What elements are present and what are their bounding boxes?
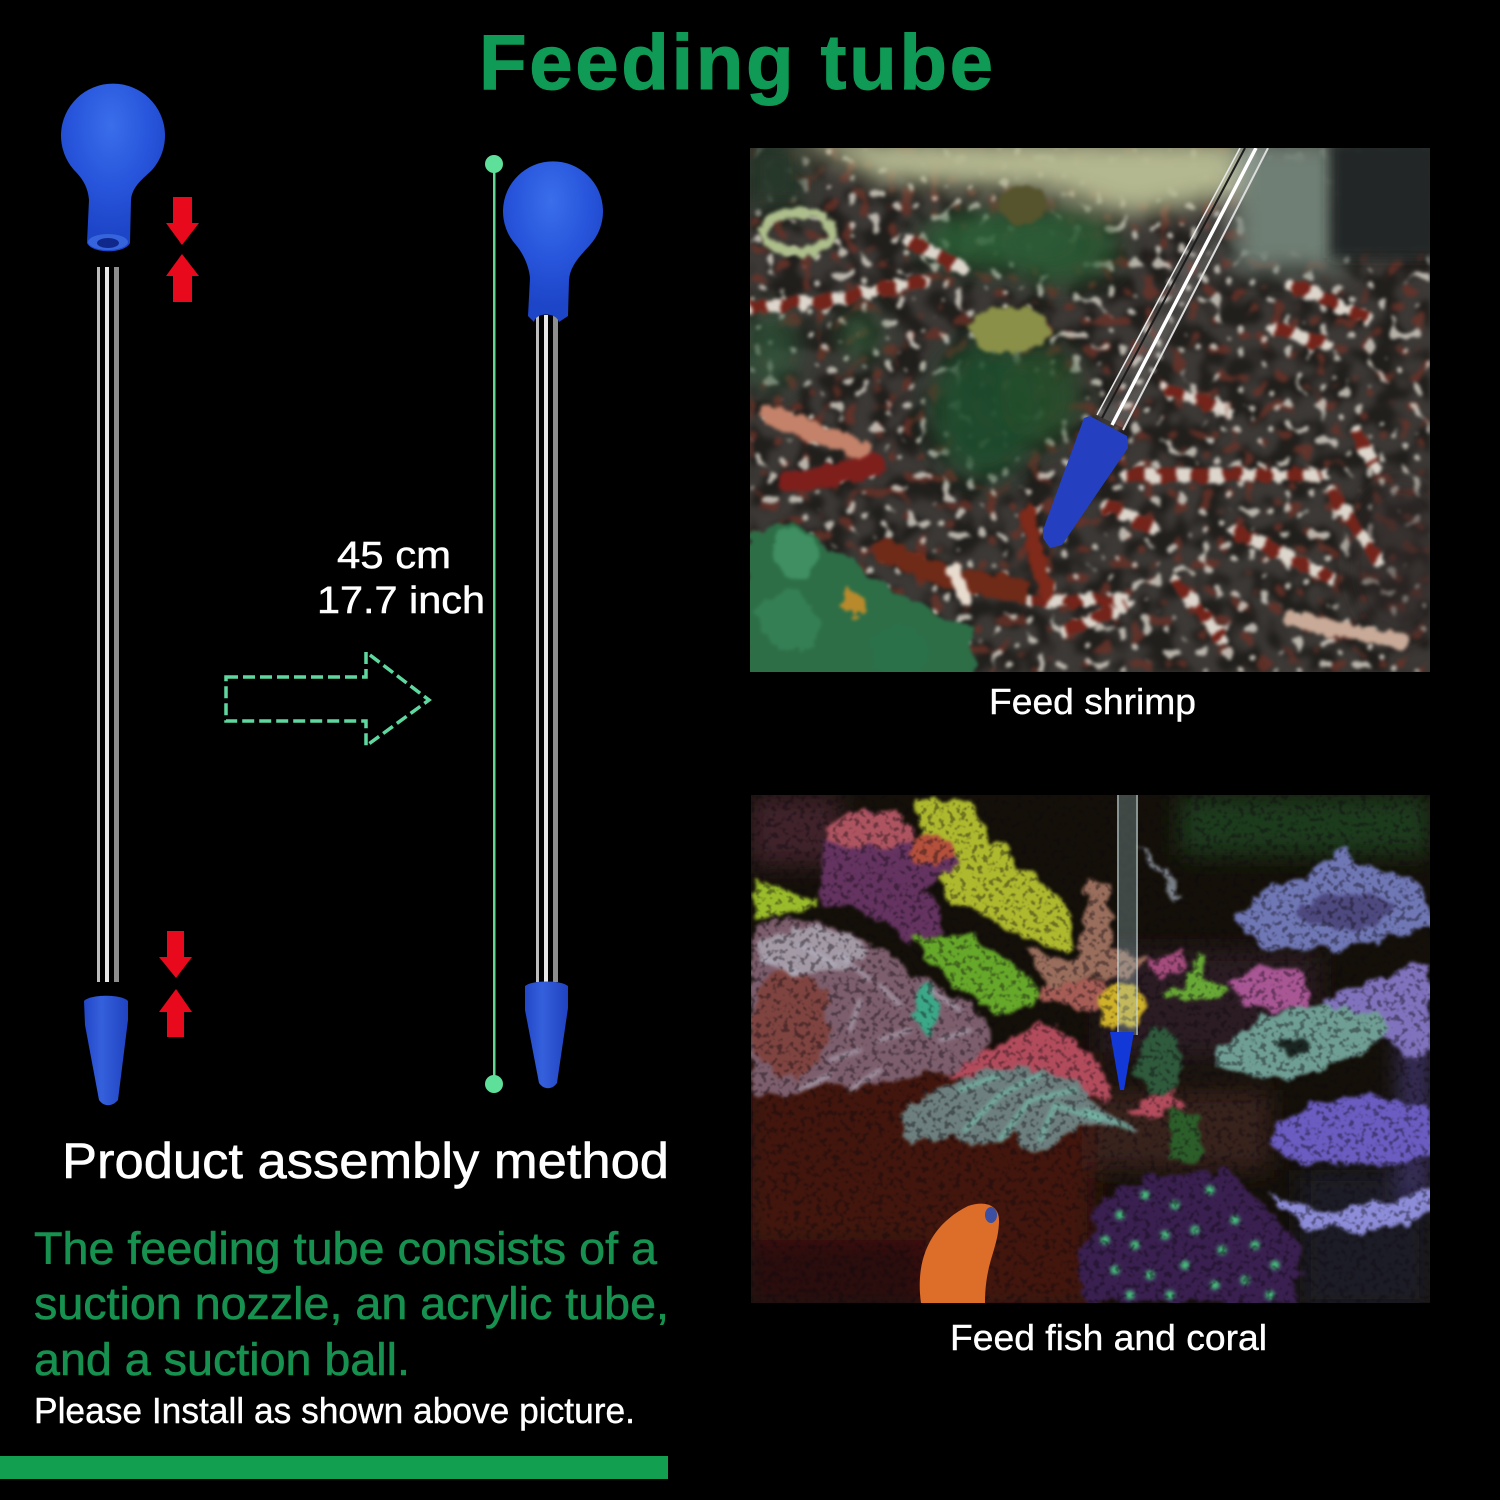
diagram: disassembled feeding tube bbox=[61, 84, 199, 1105]
heading: product assembly method: Product assembly method bbox=[62, 1133, 669, 1189]
purple plate coral bbox=[1265, 1095, 1430, 1166]
description text: The feeding tube consists of a bbox=[34, 1223, 658, 1274]
description text: and a suction ball. bbox=[34, 1334, 410, 1385]
substrate speckle bbox=[750, 148, 1430, 672]
coral texture bbox=[751, 795, 1430, 1303]
bottom bar bbox=[0, 1456, 668, 1479]
length label bbox=[317, 535, 485, 622]
arrows: bottom joint bbox=[159, 931, 192, 1037]
lilac coral bbox=[1325, 964, 1430, 1060]
green coral bbox=[915, 935, 1040, 1015]
install note: Please Install as shown above picture. bbox=[34, 1390, 635, 1431]
green-dotted coral bbox=[1075, 1172, 1300, 1303]
photo: feed shrimp bbox=[740, 140, 1450, 680]
length label: 45 cm bbox=[337, 535, 451, 577]
description text bbox=[34, 1223, 669, 1385]
green moss bbox=[1170, 1110, 1200, 1160]
arrow: assembly direction bbox=[226, 652, 429, 746]
description text: suction nozzle, an acrylic tube, bbox=[34, 1278, 669, 1329]
tank background and plants bbox=[740, 140, 1450, 640]
ring coral and moss clump bbox=[764, 185, 1050, 354]
photo: feed fish and coral bbox=[745, 795, 1430, 1310]
teal plate coral bbox=[1215, 1003, 1390, 1077]
corals bbox=[751, 800, 1430, 1303]
yellow-green coral bbox=[915, 800, 1075, 945]
orange fish bbox=[920, 1204, 999, 1303]
background fish bbox=[1140, 845, 1185, 900]
green and magenta coral bbox=[1160, 945, 1225, 1000]
tube bbox=[1097, 148, 1268, 430]
dark red rock base bbox=[745, 795, 1430, 1310]
left pale coral bbox=[751, 920, 988, 1100]
suction nozzle bbox=[84, 996, 128, 1105]
yellow coral bbox=[1096, 985, 1148, 1025]
nozzle bbox=[1043, 416, 1128, 548]
caption: feed shrimp: Feed shrimp bbox=[989, 681, 1196, 722]
yellow-green left patch bbox=[752, 880, 818, 920]
teal branching coral bbox=[905, 1065, 1140, 1150]
shrimp bbox=[750, 241, 1400, 641]
dark post bbox=[1330, 140, 1440, 258]
green tufted coral bbox=[1138, 1030, 1182, 1094]
pale branch coral bbox=[1020, 880, 1150, 985]
pink coral bbox=[940, 1020, 1112, 1100]
length measure line bbox=[485, 155, 503, 1093]
icon: suction ball bbox=[61, 84, 165, 251]
arrows: top joint bbox=[166, 197, 199, 302]
diagram: assembled feeding tube bbox=[503, 161, 603, 1088]
blue-purple plate coral bbox=[1235, 845, 1430, 950]
green polyps bbox=[1100, 1186, 1280, 1300]
tube bbox=[1117, 795, 1138, 1035]
pink and purple rock bbox=[820, 810, 960, 945]
caption: feed fish and coral: Feed fish and coral bbox=[950, 1317, 1267, 1358]
suction nozzle bbox=[525, 982, 568, 1088]
acrylic tube bbox=[97, 267, 119, 982]
icon: suction ball bbox=[503, 161, 603, 322]
length label: 17.7 inch bbox=[317, 580, 485, 622]
coral streaks bbox=[765, 945, 1130, 1140]
acrylic tube bbox=[536, 315, 558, 982]
nozzle bbox=[1110, 1032, 1134, 1090]
lower-left plants bbox=[745, 525, 975, 680]
title: Feeding tube bbox=[479, 18, 993, 106]
